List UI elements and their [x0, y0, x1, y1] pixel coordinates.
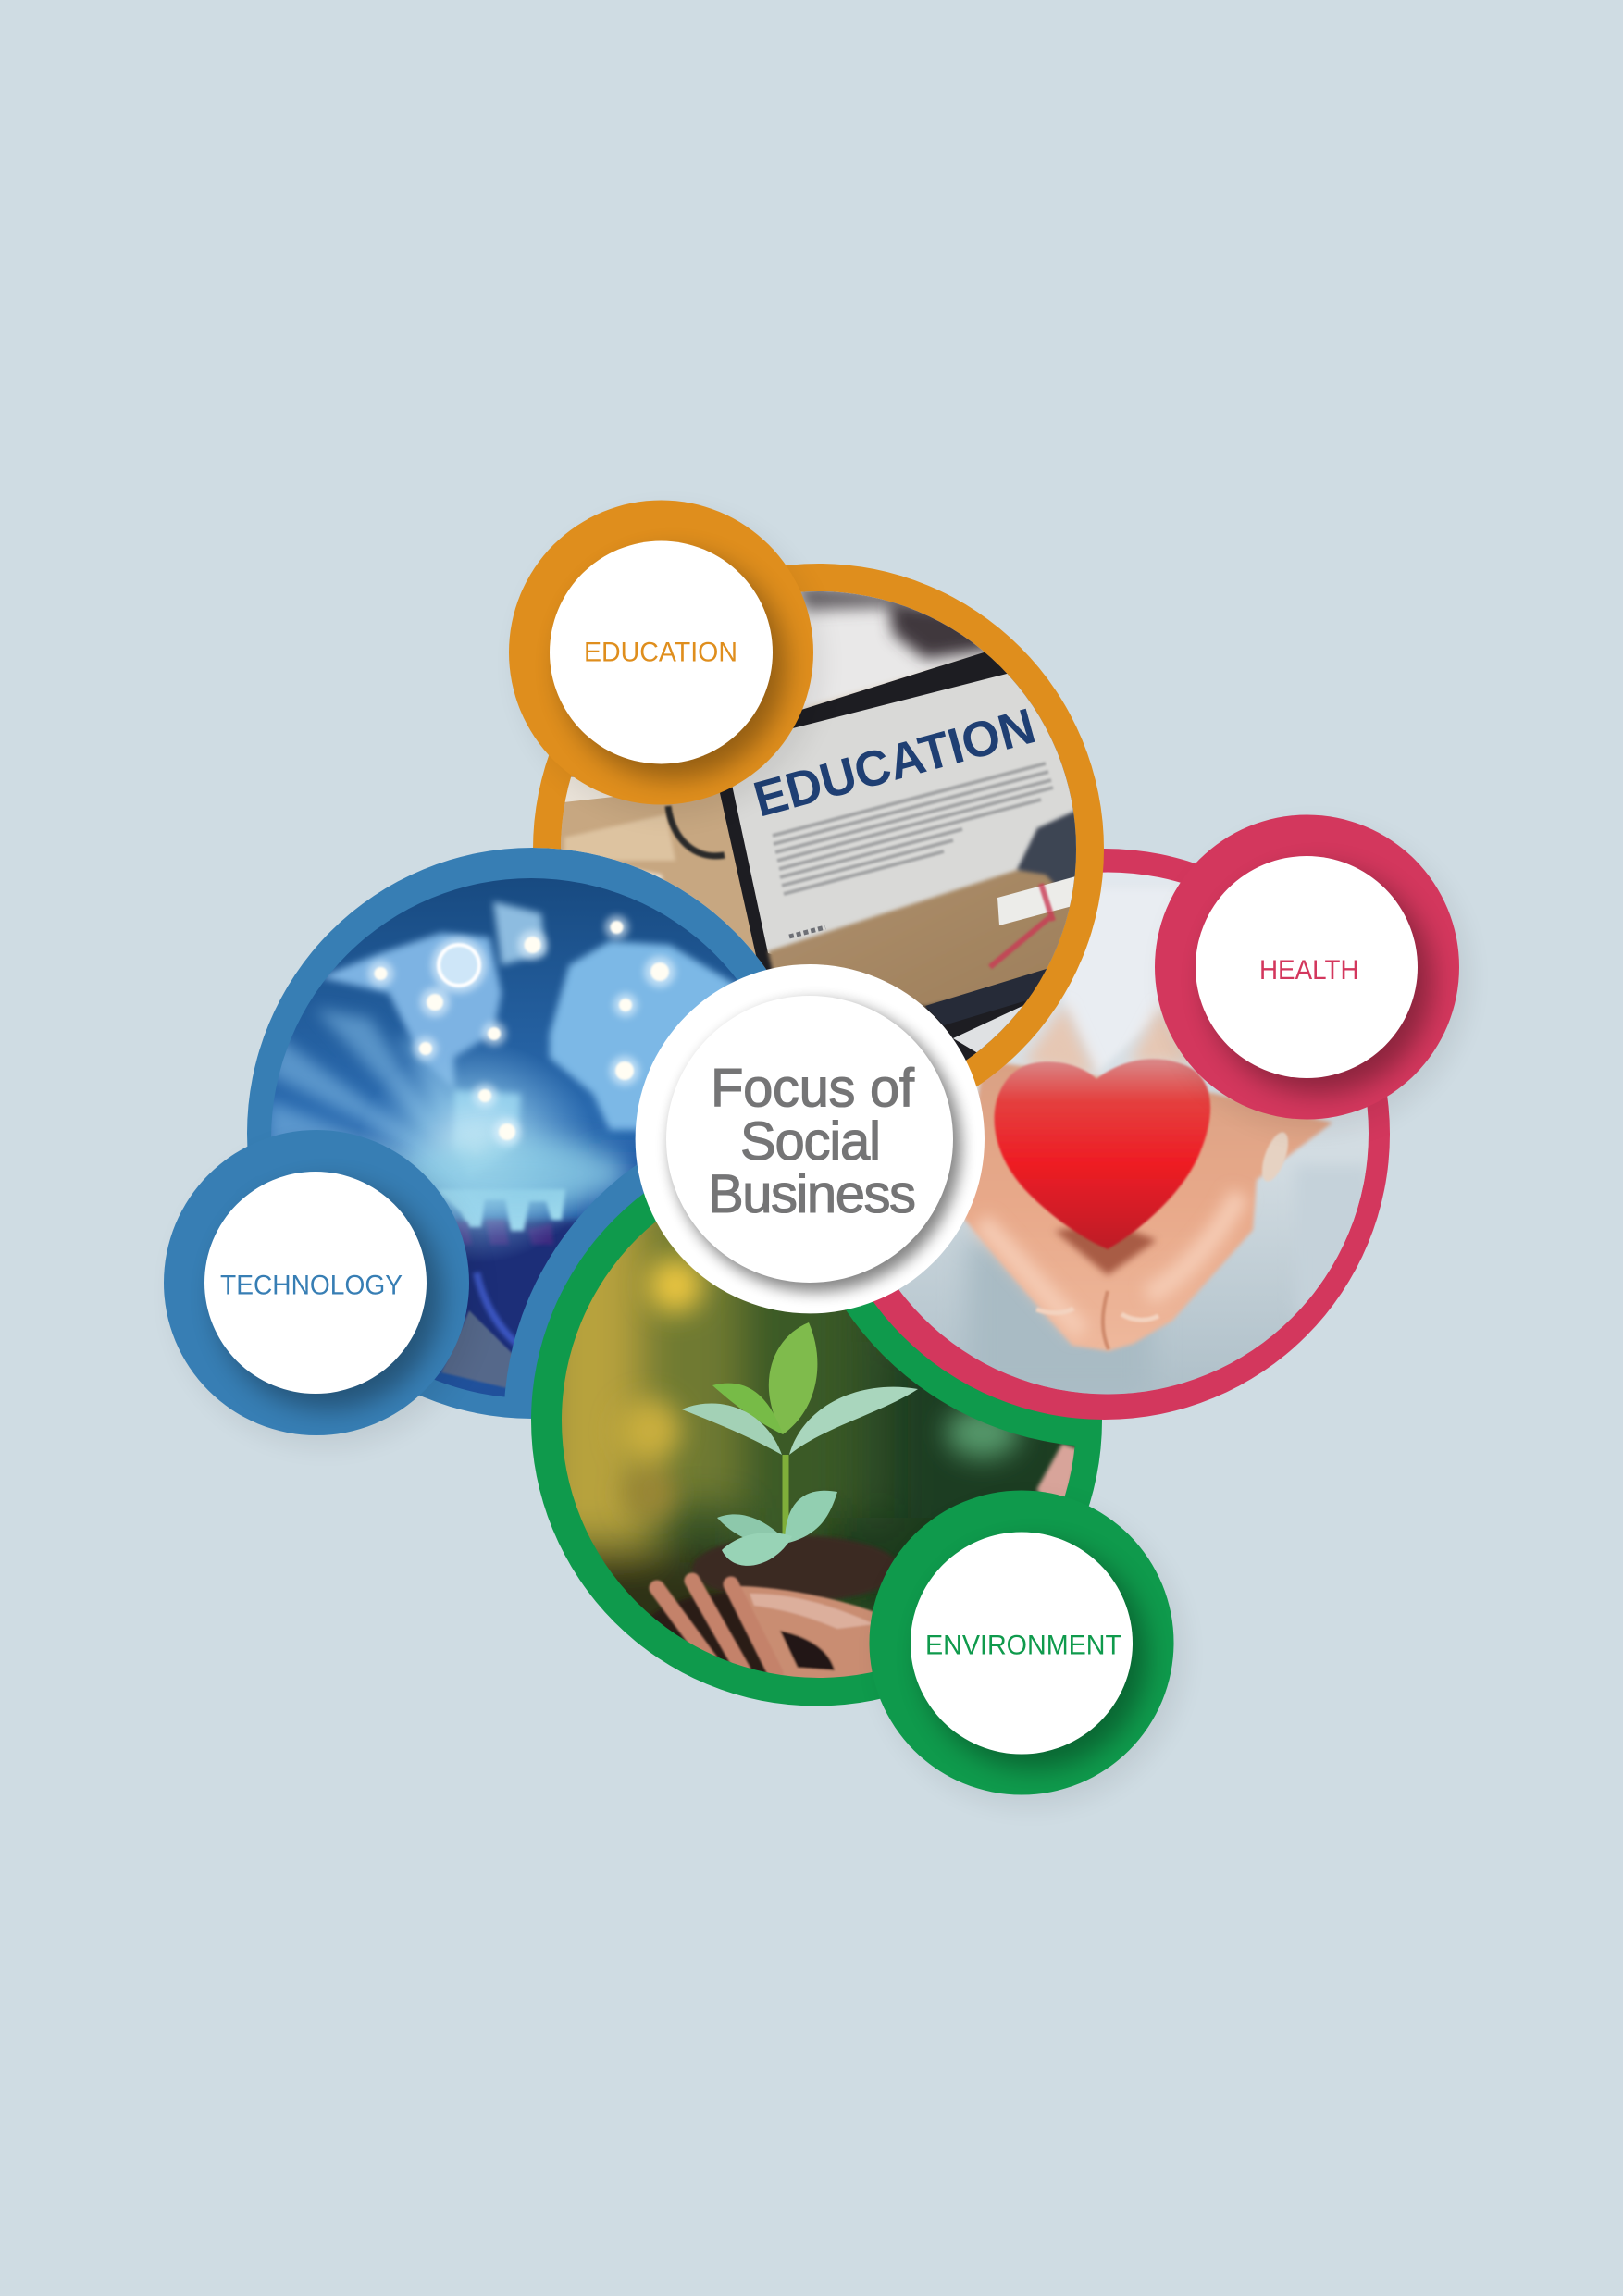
panel: education photo circle [533, 564, 1110, 1135]
title: Business [708, 1164, 916, 1224]
tablet body text [773, 763, 1053, 894]
panel: technology photo circle [247, 848, 818, 1419]
label: health: HEALTH [1259, 955, 1358, 986]
title: Focus of [711, 1059, 915, 1119]
icon: network lights on map [368, 915, 675, 1146]
panel: health label circle [1155, 814, 1468, 1131]
icon: red heart [995, 1059, 1210, 1249]
panel: environment label circle [870, 1490, 1183, 1806]
panel: education label circle [509, 500, 823, 816]
panel: health photo circle [819, 849, 1390, 1420]
tablet frame [720, 652, 1076, 1061]
icon: seedling [682, 1322, 918, 1566]
tablet screen [733, 674, 1076, 975]
title: Social [740, 1111, 881, 1172]
panel: central focus circle [636, 964, 985, 1313]
diploma [997, 876, 1075, 925]
panel: environment photo circle [531, 1194, 1102, 1706]
icon: cupped hands [960, 1061, 1332, 1351]
label: technology: TECHNOLOGY [220, 1271, 403, 1301]
tablet heading: EDUCATION [748, 698, 1041, 828]
label: environment: ENVIRONMENT [925, 1631, 1121, 1661]
panel: technology label circle [164, 1130, 478, 1446]
icon: holding hands [657, 1581, 893, 1684]
title [708, 1059, 916, 1224]
label: education: EDUCATION [584, 638, 737, 668]
